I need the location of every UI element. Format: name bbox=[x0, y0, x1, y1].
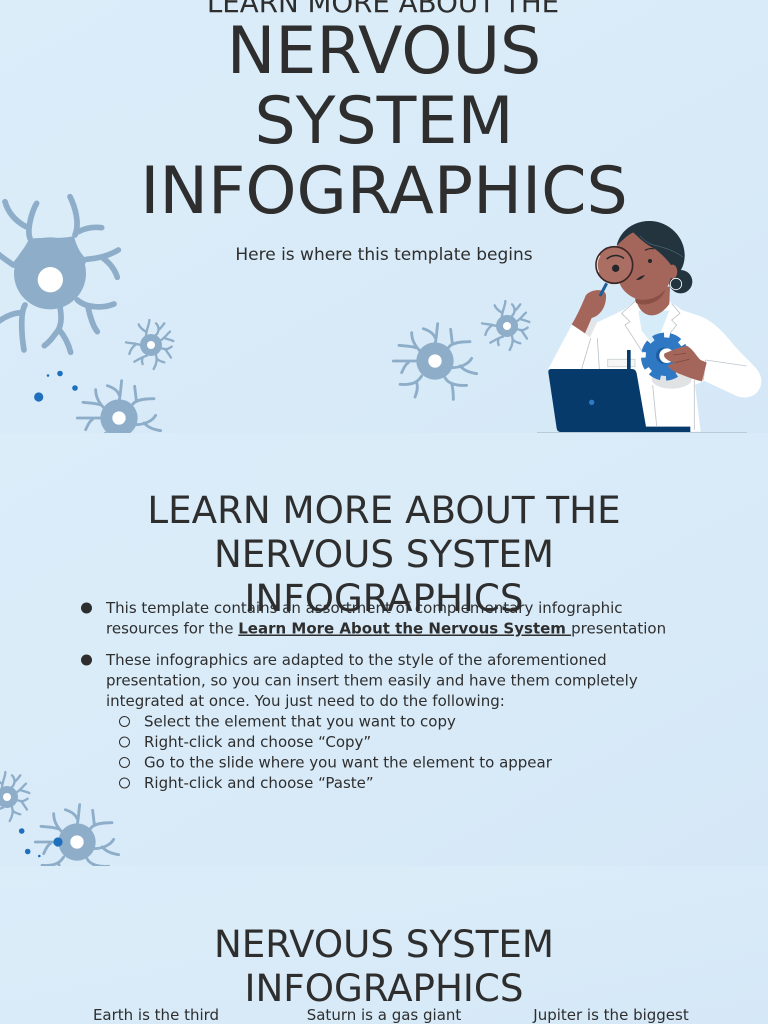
icon: small neuron left bbox=[126, 320, 173, 369]
bullet 2 bbox=[81, 651, 638, 710]
pocket bbox=[608, 359, 635, 367]
shirt bbox=[638, 311, 669, 343]
face bbox=[617, 231, 672, 300]
heading bbox=[151, 495, 618, 612]
laptop bbox=[548, 369, 690, 432]
icon: small neuron centre right bbox=[482, 301, 529, 350]
ground line bbox=[537, 432, 747, 433]
subtitle: Here is where this template begins bbox=[235, 245, 533, 265]
eye and mouth bbox=[648, 259, 652, 263]
magnifier bbox=[600, 283, 607, 296]
main title bbox=[146, 24, 624, 214]
column text: Saturn: Saturn is a gas giant bbox=[307, 1006, 461, 1024]
panel: third slide bbox=[0, 866, 768, 1024]
illustration: scientist with magnifier and laptop bbox=[537, 221, 761, 432]
panel: title slide bbox=[0, 0, 768, 456]
blue dots bbox=[19, 828, 63, 857]
sub-list bbox=[120, 712, 553, 792]
sub-list: Go to the slide where you want the element to appear bbox=[144, 754, 553, 772]
bullet 2: presentation, so you can insert them easily and have them completely bbox=[106, 672, 638, 690]
heading bbox=[214, 922, 554, 1010]
hair bbox=[617, 221, 685, 272]
hand on gear bbox=[664, 346, 707, 381]
raised arm bbox=[585, 318, 597, 337]
bullet 1: This template contains an assortment of complementary infographic bbox=[105, 599, 623, 617]
heading: NERVOUS SYSTEM bbox=[214, 532, 554, 576]
panel: instructions slide bbox=[0, 495, 665, 866]
main title: INFOGRAPHICS bbox=[140, 154, 628, 229]
gear shadow bbox=[652, 372, 692, 388]
sub-list: Right-click and choose “Copy” bbox=[144, 733, 371, 751]
icon: medium neuron bbox=[34, 803, 120, 866]
main title: SYSTEM bbox=[254, 84, 514, 159]
pen bbox=[627, 350, 631, 369]
icon: small neuron bbox=[0, 772, 29, 821]
earring bbox=[670, 278, 682, 290]
sub-list: Select the element that you want to copy bbox=[144, 712, 456, 730]
column text: Earth: Earth is the third bbox=[93, 1006, 219, 1024]
icon: clipped neuron bottom left bbox=[76, 379, 162, 433]
gear bbox=[641, 332, 686, 381]
heading: NERVOUS SYSTEM bbox=[214, 922, 554, 966]
heading: INFOGRAPHICS bbox=[245, 576, 523, 620]
bullet 1 bbox=[81, 599, 666, 638]
column text: Jupiter: Jupiter is the biggest bbox=[532, 1006, 689, 1024]
bun bbox=[669, 270, 692, 293]
bullet 1: resources for the Learn More About the Nervous System presentation bbox=[106, 620, 666, 638]
icon: medium neuron centre bbox=[393, 324, 477, 399]
ear bbox=[670, 264, 678, 279]
icon: large neuron bbox=[0, 197, 118, 352]
neck bbox=[635, 287, 670, 315]
sub-list: Right-click and choose “Paste” bbox=[144, 774, 374, 792]
heading: INFOGRAPHICS bbox=[245, 966, 523, 1010]
bullet 2: These infographics are adapted to the style of the aforementioned bbox=[105, 651, 607, 669]
coat details bbox=[582, 300, 747, 430]
body and coat bbox=[548, 287, 761, 432]
blue dots bbox=[34, 371, 78, 402]
heading: LEARN MORE ABOUT THE bbox=[147, 488, 621, 532]
bullet 2: integrated at once. You just need to do the following: bbox=[106, 692, 505, 710]
main title: NERVOUS bbox=[227, 14, 541, 89]
head bbox=[596, 221, 692, 304]
